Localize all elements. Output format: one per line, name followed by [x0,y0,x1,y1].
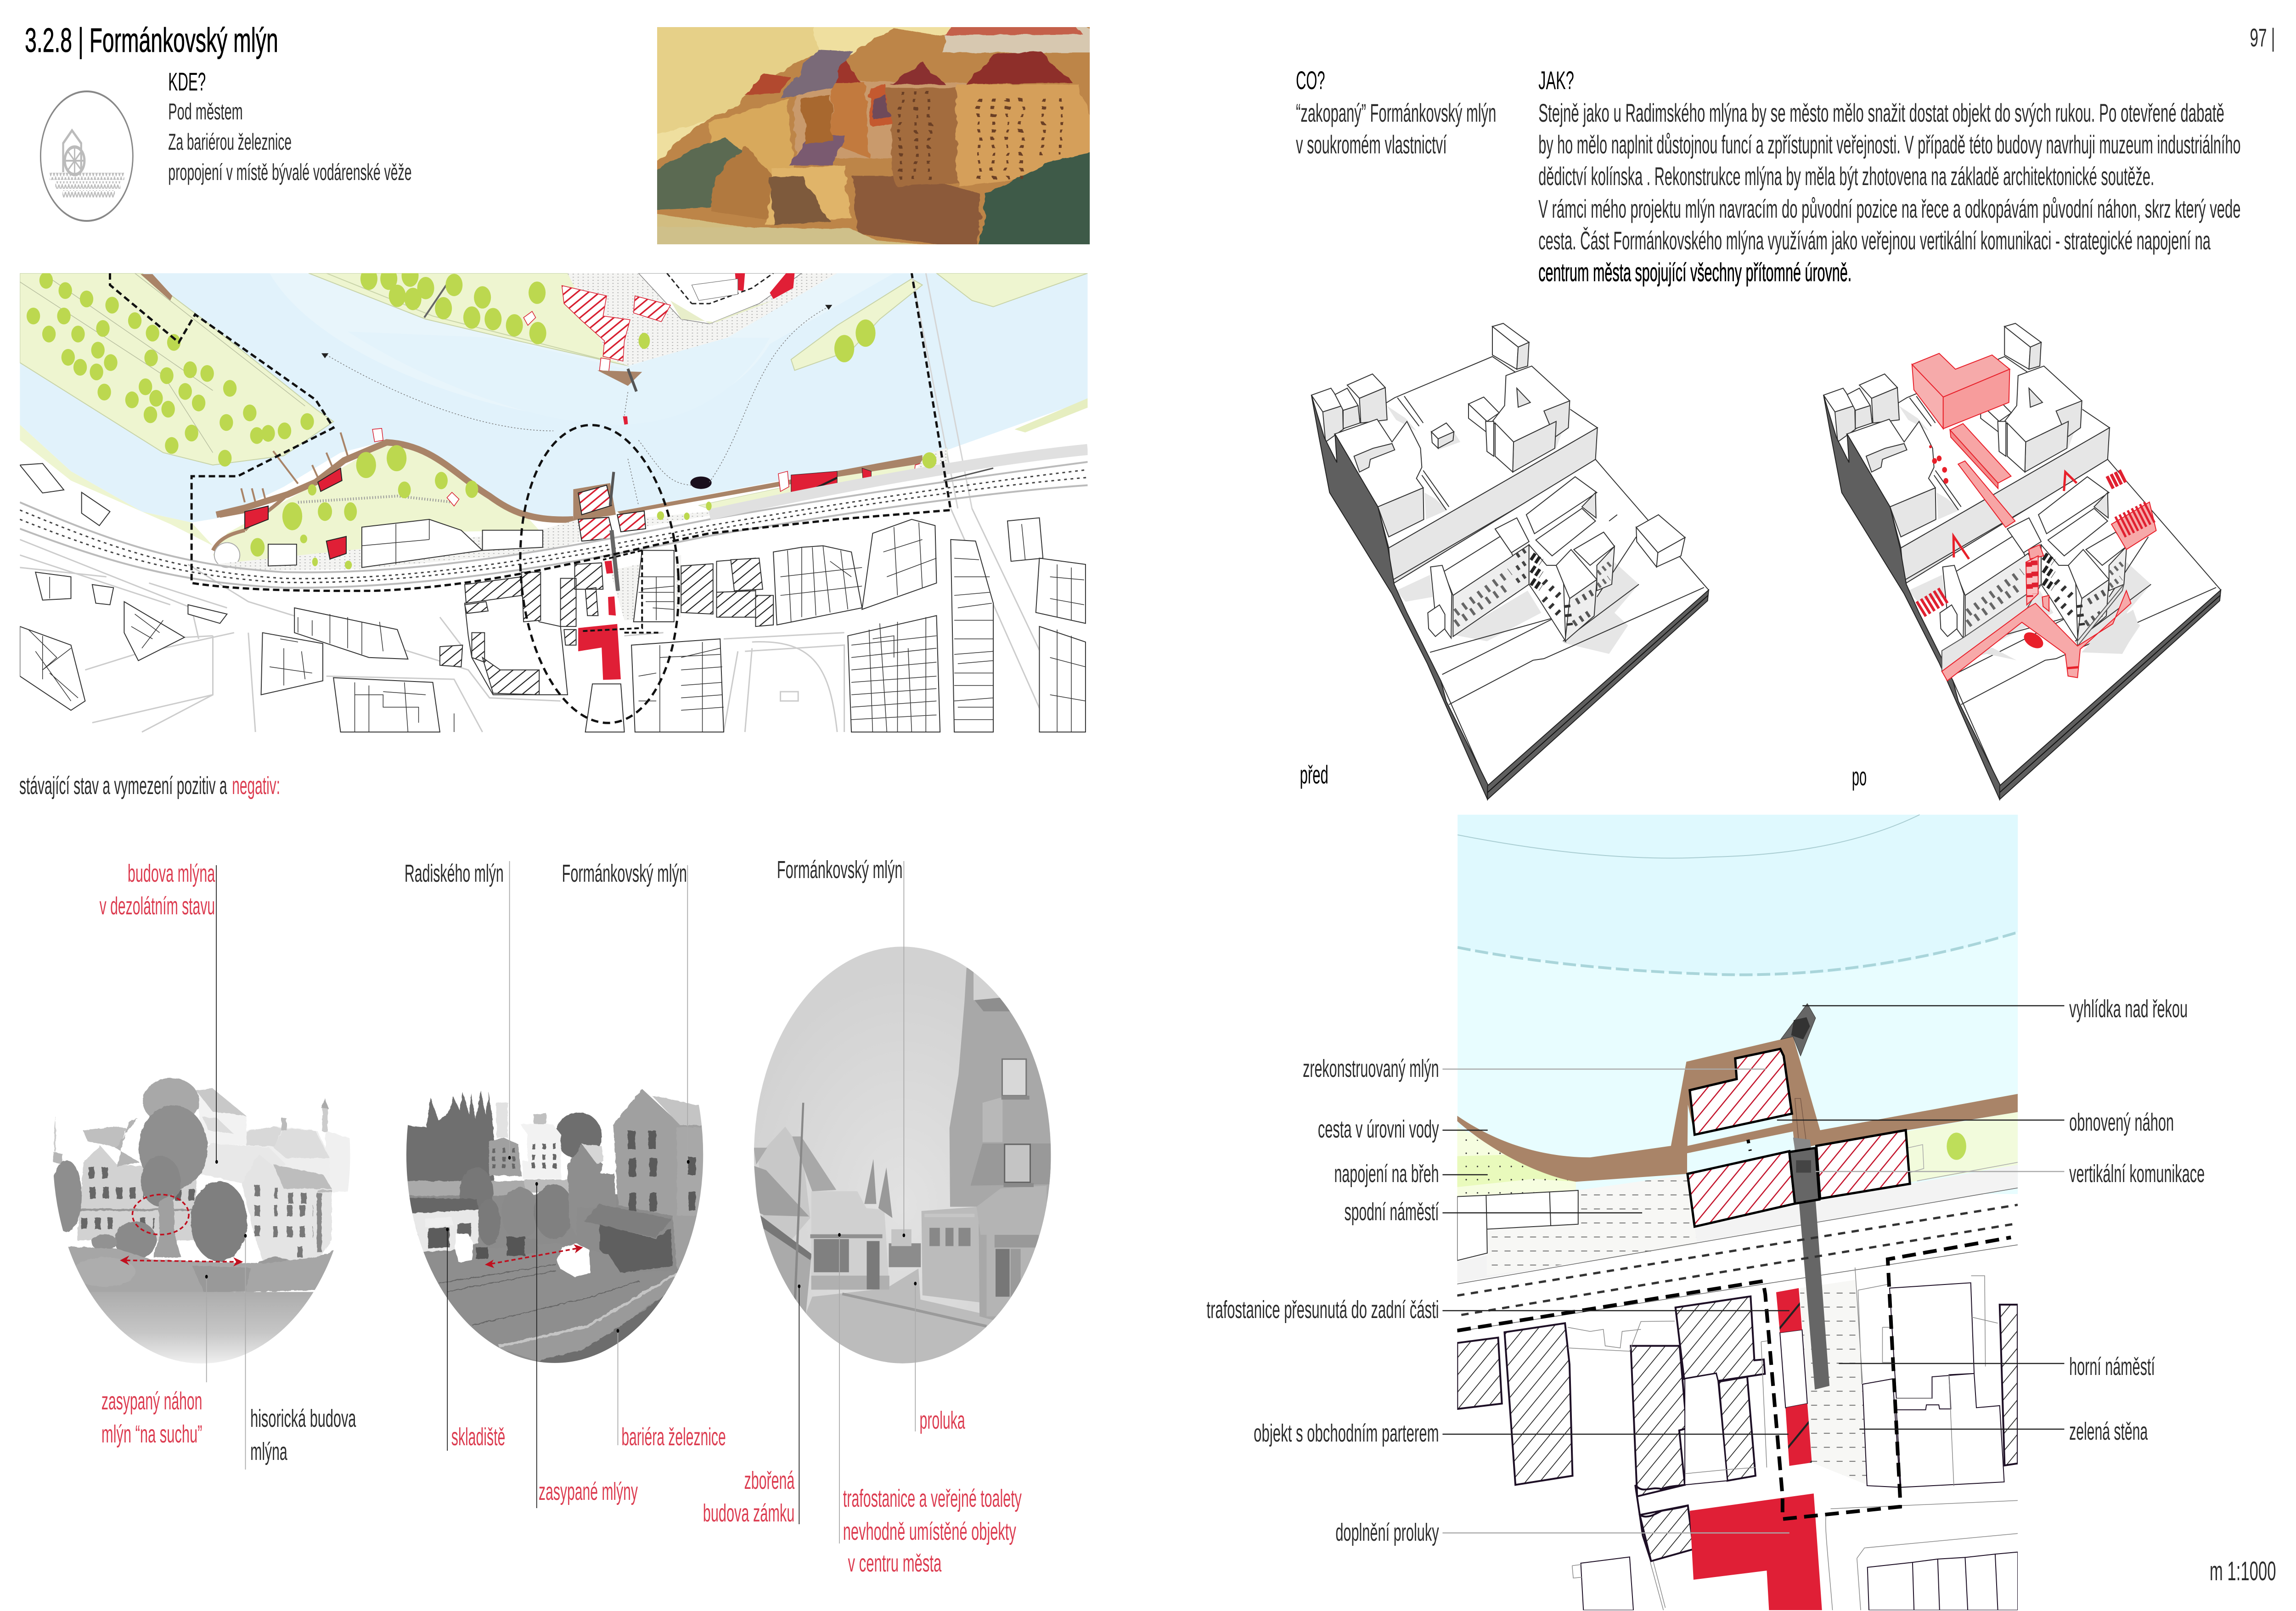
ground [1457,1195,2018,1610]
upper town plaza [568,273,837,366]
walkway [612,530,618,591]
plan labels left: doplnění proluky [1335,1519,1439,1546]
text block: KDE?: Za bariérou železnice [168,130,292,155]
label: trafostanice a veřejné toalety: v centru města [848,1549,942,1577]
red buildings [245,506,268,529]
city grey lines [20,508,1078,732]
lower square pattern [1487,1175,1697,1276]
vertical communication [1790,1148,1819,1204]
label: zasypané mlýny: zasypané mlýny [539,1478,638,1505]
hatched buildings [440,558,773,695]
text block: JAK?: JAK? [1538,66,1574,95]
plan labels right [2069,995,2205,1445]
label: bariéra železnice [617,1329,726,1451]
plan labels left: objekt s obchodním parterem [1254,1419,1439,1447]
text block: CO?: CO? [1296,66,1325,95]
boat and river routes [690,477,712,489]
label: Formánkovský mlýn in circle 3 [777,856,905,1237]
plan labels right: vertikální komunikace [2069,1160,2205,1188]
plazas [213,519,582,570]
label: budova mlýna v dezolátním stavu [100,860,218,1164]
text block: KDE?: Pod městem [168,99,243,125]
label: skladiště: skladiště [451,1423,505,1451]
subtitle: existing state: stávající stav a vymezení pozitiv a [19,772,227,800]
brown embankment [216,442,573,520]
label: proluka [914,1282,965,1434]
axonometric model: after [1823,323,2221,800]
plan labels right: horní náměstí [2069,1353,2155,1380]
label: Formánkovský mlýn in circle 3: Formánkovský mlýn [777,856,903,884]
park island top [309,273,628,366]
label: budova mlýna v dezolátním stavu: budova mlýna [128,860,215,887]
label: Radiského mlýn: Radiského mlýn [405,860,504,887]
photo circle 3: gap site in the town [752,945,1052,1364]
park island left [20,273,333,465]
label: trafostanice a veřejné toalety [838,1233,1022,1577]
page number: 97 | [2250,23,2275,52]
label: zbořená budova zámku: budova zámku [703,1499,794,1527]
railway [20,470,1088,582]
city buildings [20,463,1086,732]
grey pavement [1457,1165,2018,1283]
text block: CO?: v soukromém vlastnictví [1296,130,1447,159]
plan labels left: cesta v úrovni vody [1318,1115,1439,1143]
label: Formánkovský mlýn in circle 2 [562,860,690,1164]
label: zasypané mlýny [535,1182,638,1508]
text block: JAK?: centrum města spojující všechny přítomné úrovně. [1538,258,1851,287]
reconstructed mill [1690,1049,1792,1135]
label: zbořená budova zámku [703,1284,800,1527]
label: historická budova mlýna: hisorická budova [250,1405,356,1432]
left white buildings [1457,1190,1578,1261]
mill race water [1687,1132,1795,1172]
label: historická budova mlýna: mlýna [250,1438,287,1465]
image: historic painting of the castle [657,27,1090,244]
plan labels left: spodní náměstí [1345,1198,1439,1226]
river water [1458,815,2018,976]
text block: CO?: “zakopaný” Formánkovský mlýn [1296,99,1496,128]
text block: CO? [1296,66,1496,159]
plan labels left: zrekonstruovaný mlýn [1303,1055,1439,1082]
icon: water mill in circle [40,91,133,221]
photo circle 2: railway yard and mills [399,1089,712,1376]
label: Radiského mlýn [405,860,511,1160]
south bank park [213,443,539,569]
small island right [791,279,923,370]
red route arrow [491,1249,577,1264]
label: zasypaný náhon: zasypaný náhon [101,1387,202,1415]
label: historická budova mlýna [244,1234,356,1470]
trees [27,265,936,569]
photo circle 1: mill from the river [46,1078,359,1366]
text block: KDE?: propojení v místě bývalé vodárenské věže [168,160,412,186]
damaged wall between hatch [1635,1485,1688,1561]
focus ellipse [512,424,687,724]
lookout [1781,1003,1816,1056]
plan labels right: vyhlídka nad řekou [2069,995,2188,1023]
buildings near the park [362,519,483,568]
project boundary [1457,1237,2011,1519]
river [20,273,1088,523]
gap filler building [1690,1493,1822,1610]
plan labels left [1207,1055,1439,1546]
left bank green [1457,1127,1576,1197]
plan labels left: napojení na břeh [1334,1160,1439,1188]
plan labels left: trafostanice přesunutá do zadní části [1207,1296,1439,1324]
plan labels right: obnovený náhon [2069,1109,2174,1136]
hatched existing buildings [1457,1296,2018,1561]
piers [241,433,348,502]
text block: KDE?: KDE? [168,68,206,96]
right bank green [1906,1112,2018,1182]
label: Formánkovský mlýn in circle 2: Formánkovský mlýn [562,860,687,887]
cube at the river bank [1636,515,1685,567]
text block: JAK? [1538,66,2241,287]
walkway [1799,1200,1829,1390]
label: před: před [1300,760,1328,789]
upper square pattern [1800,1280,1867,1485]
label: trafostanice a veřejné toalety: nevhodně umístěné objekty [843,1518,1016,1545]
railway lines [1457,1188,2018,1331]
walkway boundary dashed lines [110,273,951,591]
text block: KDE? [168,68,412,186]
small cube [1431,423,1460,450]
map: city situation along the river [20,265,1088,732]
mill [578,485,612,515]
label: trafostanice a veřejné toalety: trafostanice a veřejné toalety [843,1485,1022,1512]
label: po: po [1852,762,1867,791]
scale note: m 1:1000 [2210,1556,2276,1586]
label: bariéra železnice: bariéra železnice [621,1423,726,1451]
white existing buildings [1581,1283,2018,1610]
axonometric model: before [1311,323,1709,800]
subtitle: existing state: negativ: [232,772,280,800]
label: zasypaný náhon [101,1275,208,1448]
brown riverside path [1457,1036,2018,1182]
red markers [132,1194,189,1234]
label: proluka: proluka [920,1407,965,1434]
label: zasypaný náhon: mlýn “na suchu” [101,1420,202,1448]
leader lines [1442,1006,2064,1533]
plan labels right: zelená stěna [2069,1418,2148,1445]
transformer block and shop [1776,1288,1802,1333]
site plan: mill and two squares [1442,815,2064,1610]
label: skladiště [446,1228,505,1451]
heading: section title: 3.2.8 | Formánkovský mlýn [25,21,278,59]
label: zbořená budova zámku: zbořená [744,1467,795,1494]
label: budova mlýna v dezolátním stavu: v dezolátním stavu [100,892,215,920]
red interventions [1912,354,2156,681]
